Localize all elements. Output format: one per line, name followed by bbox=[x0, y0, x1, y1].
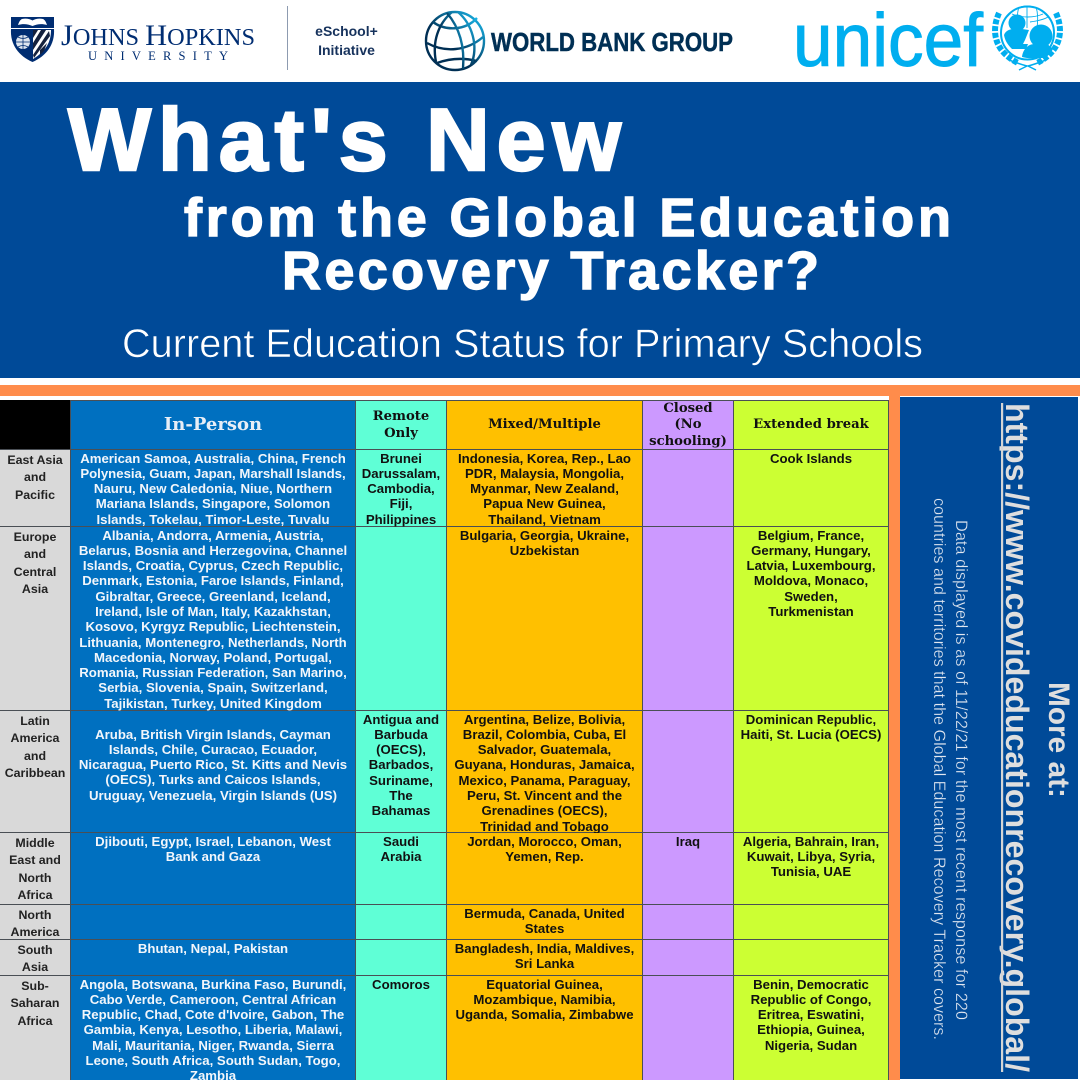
logo: eSchool+ Initiative bbox=[315, 23, 378, 58]
in-person countries bbox=[71, 833, 356, 905]
closed countries bbox=[643, 527, 734, 711]
remote countries bbox=[356, 711, 447, 833]
mixed countries: Mexico, Panama, Paraguay, bbox=[458, 773, 630, 788]
title banner bbox=[0, 82, 1080, 378]
in-person countries: Serbia, Slovenia, Spain, Switzerland, bbox=[98, 680, 328, 695]
mixed countries: Salvador, Guatemala, bbox=[478, 742, 611, 757]
in-person countries: Nicaragua, Puerto Rico, St. Kitts and Nevis bbox=[79, 757, 347, 772]
extended break countries: Republic of Congo, bbox=[751, 992, 871, 1007]
in-person countries: Mali, Mauritania, Niger, Rwanda, Sierra bbox=[92, 1038, 334, 1053]
sidebar note line 2: countries and territories that the Global Education Recovery Tracker covers. bbox=[930, 498, 948, 1040]
extended break countries: Eritrea, Eswatini, bbox=[758, 1007, 864, 1022]
extended break countries: Cook Islands bbox=[770, 450, 852, 466]
table header row bbox=[0, 400, 889, 450]
region label: Pacific bbox=[15, 488, 55, 502]
mixed countries: Myanmar, New Zealand, bbox=[470, 481, 619, 496]
in-person countries bbox=[71, 527, 356, 711]
extended break countries: Turkmenistan bbox=[768, 604, 854, 619]
title line: Recovery Tracker?: Recovery Tracker? bbox=[282, 241, 819, 301]
closed countries bbox=[643, 976, 734, 1080]
in-person countries: American Samoa, Australia, China, French bbox=[80, 450, 346, 466]
remote countries: Arabia bbox=[380, 849, 422, 864]
extended break countries: Germany, Hungary, bbox=[751, 543, 871, 558]
in-person countries: Ireland, Isle of Man, Italy, Kazakhstan, bbox=[95, 604, 331, 619]
extended break countries: Moldova, Monaco, bbox=[754, 573, 868, 588]
mixed countries: Bangladesh, India, Maldives, bbox=[455, 940, 634, 956]
header: blank corner bbox=[0, 400, 71, 450]
closed countries bbox=[643, 450, 734, 527]
extended break countries bbox=[734, 711, 889, 833]
closed countries bbox=[643, 940, 734, 976]
header: In-Person bbox=[71, 400, 356, 450]
region label: South bbox=[17, 942, 53, 956]
row: Europe and Central Asia bbox=[0, 527, 889, 711]
header: Remote Only: Only bbox=[384, 426, 418, 440]
in-person countries bbox=[71, 711, 356, 833]
in-person countries: Nauru, New Caledonia, Niue, Northern bbox=[94, 481, 332, 496]
sidebar heading: More at: More at: bbox=[1042, 682, 1075, 798]
in-person countries bbox=[71, 940, 356, 976]
in-person countries: Gibraltar, Greece, Greenland, Iceland, bbox=[95, 589, 331, 604]
extended break countries: Tunisia, UAE bbox=[771, 864, 851, 879]
region label bbox=[0, 940, 71, 976]
logo: World Bank Group bbox=[426, 12, 733, 70]
remote countries: Fiji, bbox=[390, 496, 412, 511]
region label: Africa bbox=[17, 1014, 53, 1028]
extended break countries bbox=[734, 976, 889, 1080]
mixed countries: Bulgaria, Georgia, Ukraine, bbox=[460, 528, 629, 542]
extended break countries bbox=[734, 905, 889, 940]
logo: Johns Hopkins University: JOHNS HOPKINS bbox=[61, 19, 255, 52]
in-person countries: Macedonia, Norway, Poland, Portugal, bbox=[94, 650, 332, 665]
in-person countries: Cabo Verde, Cameroon, Central African bbox=[90, 992, 336, 1007]
row: Sub-Saharan Africa bbox=[0, 976, 889, 1080]
region label bbox=[0, 976, 71, 1080]
extended break countries bbox=[734, 833, 889, 905]
mixed countries: Mozambique, Namibia, bbox=[473, 992, 616, 1007]
region label: America bbox=[11, 925, 59, 939]
in-person countries: (OECS), Turks and Caicos Islands, bbox=[105, 772, 321, 787]
mixed countries bbox=[447, 940, 643, 976]
region label: Europe bbox=[14, 530, 56, 544]
extended break countries: Belgium, France, bbox=[758, 528, 864, 542]
mixed countries: Peru, St. Vincent and the bbox=[467, 788, 622, 803]
region label: Africa bbox=[17, 888, 53, 902]
region label: Middle bbox=[15, 836, 55, 850]
header: Extended break: Extended break bbox=[753, 417, 869, 432]
region label: East and bbox=[9, 853, 61, 867]
mixed countries: Sri Lanka bbox=[515, 956, 574, 971]
mixed countries: Brazil, Colombia, Cuba, El bbox=[463, 727, 626, 742]
mixed countries: Papua New Guinea, bbox=[483, 496, 606, 511]
remote countries: Bahamas bbox=[372, 803, 430, 818]
mixed countries: Guyana, Honduras, Jamaica, bbox=[454, 757, 635, 772]
in-person countries: Romania, Russian Federation, San Marino, bbox=[79, 665, 347, 680]
logo: eSchool+ Initiative: eSchool+ bbox=[315, 23, 378, 39]
remote countries: The bbox=[389, 788, 413, 803]
region label: East Asia bbox=[7, 452, 63, 466]
row: Middle East and North Africa bbox=[0, 833, 889, 905]
in-person countries bbox=[71, 976, 356, 1080]
region label bbox=[0, 905, 71, 940]
remote countries: Saudi bbox=[383, 834, 419, 848]
mixed countries: Uganda, Somalia, Zimbabwe bbox=[455, 1007, 634, 1022]
mixed countries: Equatorial Guinea, bbox=[486, 976, 603, 992]
region label: and bbox=[24, 547, 46, 561]
remote countries: Philippines bbox=[366, 512, 436, 527]
closed countries bbox=[643, 905, 734, 940]
in-person countries: Uruguay, Venezuela, Virgin Islands (US) bbox=[89, 788, 337, 803]
header: Remote Only bbox=[356, 400, 447, 450]
remote countries: Barbados, bbox=[369, 757, 433, 772]
header: Remote Only: Remote bbox=[373, 409, 429, 424]
extended break countries: Nigeria, Sudan bbox=[765, 1038, 857, 1053]
mixed countries: Uzbekistan bbox=[510, 543, 579, 558]
mixed countries bbox=[447, 450, 643, 527]
region label bbox=[0, 833, 71, 905]
mixed countries: Thailand, Vietnam bbox=[488, 512, 601, 527]
region label: Asia bbox=[22, 582, 48, 596]
mixed countries: Bermuda, Canada, United bbox=[464, 906, 625, 920]
remote countries bbox=[356, 976, 447, 1080]
extended break countries bbox=[734, 450, 889, 527]
logo: eSchool+ Initiative: Initiative bbox=[318, 42, 375, 58]
subtitle: Current Education Status for Primary Schools bbox=[122, 322, 923, 366]
table: education status by region bbox=[0, 400, 889, 1080]
in-person countries: Angola, Botswana, Burkina Faso, Burundi, bbox=[80, 976, 346, 992]
in-person countries: Polynesia, Guam, Japan, Marshall Islands, bbox=[80, 466, 346, 481]
mixed countries: States bbox=[525, 921, 564, 936]
in-person countries: Aruba, British Virgin Islands, Cayman bbox=[95, 726, 331, 742]
region label: Caribbean bbox=[5, 766, 65, 780]
region label: and bbox=[24, 470, 46, 484]
in-person countries: Mariana Islands, Singapore, Solomon bbox=[96, 496, 330, 511]
logo: World Bank Group: WORLD BANK GROUP bbox=[491, 27, 733, 57]
in-person countries: Albania, Andorra, Armenia, Austria, bbox=[102, 528, 324, 542]
in-person countries: Lithuania, Montenegro, Netherlands, North bbox=[79, 635, 347, 650]
header: Closed: schooling) bbox=[649, 434, 727, 449]
mixed countries: Grenadines (OECS), bbox=[481, 803, 608, 818]
remote countries bbox=[356, 940, 447, 976]
extended break countries bbox=[734, 527, 889, 711]
title line: from the Global Education: from the Global Education bbox=[184, 188, 951, 248]
sidebar note line 1: Data displayed is as of 11/22/21 for the most recent response for 220 bbox=[952, 520, 970, 1020]
extended break countries: Algeria, Bahrain, Iran, bbox=[743, 834, 879, 848]
remote countries: Darussalam, bbox=[362, 466, 440, 481]
region label: North bbox=[18, 908, 52, 922]
mixed countries: Yemen, Rep. bbox=[505, 849, 584, 864]
logo strip bbox=[10, 0, 1063, 82]
mixed countries bbox=[447, 833, 643, 905]
remote countries bbox=[356, 833, 447, 905]
panel: more information sidebar bbox=[900, 397, 1078, 1079]
region label bbox=[0, 450, 71, 527]
mixed countries: Argentina, Belize, Bolivia, bbox=[464, 712, 625, 726]
in-person countries: Islands, Croatia, Cyprus, Czech Republic, bbox=[83, 558, 343, 573]
closed countries bbox=[643, 833, 734, 905]
header: In-Person: In-Person bbox=[164, 414, 262, 435]
region label: Sub- bbox=[21, 978, 49, 992]
header: Mixed/Multiple bbox=[447, 400, 643, 450]
header: Closed: Closed bbox=[663, 401, 713, 416]
row: North America bbox=[0, 905, 889, 940]
remote countries bbox=[356, 527, 447, 711]
region label bbox=[0, 711, 71, 833]
row: South Asia bbox=[0, 940, 889, 976]
mixed countries bbox=[447, 976, 643, 1080]
in-person countries: Kosovo, Kyrgyz Republic, Liechtenstein, bbox=[85, 619, 340, 634]
header: Closed: (No bbox=[674, 417, 702, 432]
remote countries: Brunei bbox=[380, 450, 422, 466]
in-person countries: Leone, South Africa, South Sudan, Togo, bbox=[86, 1053, 340, 1068]
mixed countries: Jordan, Morocco, Oman, bbox=[467, 834, 622, 848]
remote countries: Antigua and bbox=[363, 712, 439, 726]
region label: Saharan bbox=[11, 996, 59, 1010]
row: Latin America and Caribbean bbox=[0, 711, 889, 834]
mixed countries: Trinidad and Tobago bbox=[480, 819, 609, 834]
title: What's New: What's New bbox=[68, 90, 622, 189]
logo: Johns Hopkins University bbox=[11, 17, 255, 63]
remote countries: Barbuda bbox=[374, 727, 428, 742]
row: East Asia and Pacific bbox=[0, 450, 889, 527]
extended break countries: Ethiopia, Guinea, bbox=[757, 1022, 865, 1037]
in-person countries: Islands, Chile, Curacao, Ecuador, bbox=[109, 742, 317, 757]
remote countries: Suriname, bbox=[369, 773, 433, 788]
remote countries: (OECS), bbox=[376, 742, 426, 757]
closed countries bbox=[643, 711, 734, 833]
header: Closed bbox=[643, 400, 734, 450]
region label bbox=[0, 527, 71, 711]
header: Mixed/Multiple: Mixed/Multiple bbox=[488, 417, 601, 432]
mixed countries bbox=[447, 711, 643, 833]
in-person countries: Islands, Tokelau, Timor-Leste, Tuvalu bbox=[96, 512, 330, 527]
in-person countries bbox=[71, 450, 356, 527]
remote countries bbox=[356, 905, 447, 940]
logo: Johns Hopkins University: UNIVERSITY bbox=[88, 49, 228, 63]
in-person countries bbox=[71, 905, 356, 940]
mixed countries: PDR, Malaysia, Mongolia, bbox=[465, 466, 624, 481]
extended break countries: Haiti, St. Lucia (OECS) bbox=[741, 727, 881, 742]
in-person countries: Gambia, Kenya, Lesotho, Liberia, Malawi, bbox=[84, 1022, 342, 1037]
extended break countries bbox=[734, 940, 889, 976]
region label: America bbox=[11, 731, 59, 745]
header: Extended break bbox=[734, 400, 889, 450]
extended break countries: Sweden, bbox=[784, 589, 838, 604]
in-person countries: Republic, Chad, Cote d'Ivoire, Gabon, The bbox=[82, 1007, 344, 1022]
mixed countries: Indonesia, Korea, Rep., Lao bbox=[458, 450, 631, 466]
in-person countries: Denmark, Estonia, Faroe Islands, Finland, bbox=[82, 573, 344, 588]
in-person countries: Bhutan, Nepal, Pakistan bbox=[138, 940, 288, 956]
closed countries: Iraq bbox=[676, 834, 700, 848]
remote countries: Cambodia, bbox=[367, 481, 435, 496]
region label: and bbox=[24, 749, 46, 763]
mixed countries bbox=[447, 905, 643, 940]
in-person countries: Djibouti, Egypt, Israel, Lebanon, West bbox=[95, 834, 331, 848]
extended break countries: Latvia, Luxembourg, bbox=[747, 558, 875, 573]
region label: Asia bbox=[22, 960, 48, 974]
in-person countries: Tajikistan, Turkey, United Kingdom bbox=[104, 696, 322, 711]
in-person countries: Belarus, Bosnia and Herzegovina, Channel bbox=[79, 543, 347, 558]
extended break countries: Dominican Republic, bbox=[746, 712, 876, 726]
mixed countries bbox=[447, 527, 643, 711]
region label: Latin bbox=[20, 714, 50, 728]
remote countries: Comoros bbox=[372, 976, 430, 992]
extended break countries: Benin, Democratic bbox=[753, 976, 869, 992]
extended break countries: Kuwait, Libya, Syria, bbox=[747, 849, 875, 864]
region label: North bbox=[18, 871, 52, 885]
region label: Central bbox=[14, 565, 56, 579]
logo: unicef: unicef bbox=[793, 0, 983, 82]
sidebar link: https://www.covideducationrecovery.global/ bbox=[999, 403, 1035, 1072]
remote countries bbox=[356, 450, 447, 527]
in-person countries: Bank and Gaza bbox=[166, 849, 260, 864]
